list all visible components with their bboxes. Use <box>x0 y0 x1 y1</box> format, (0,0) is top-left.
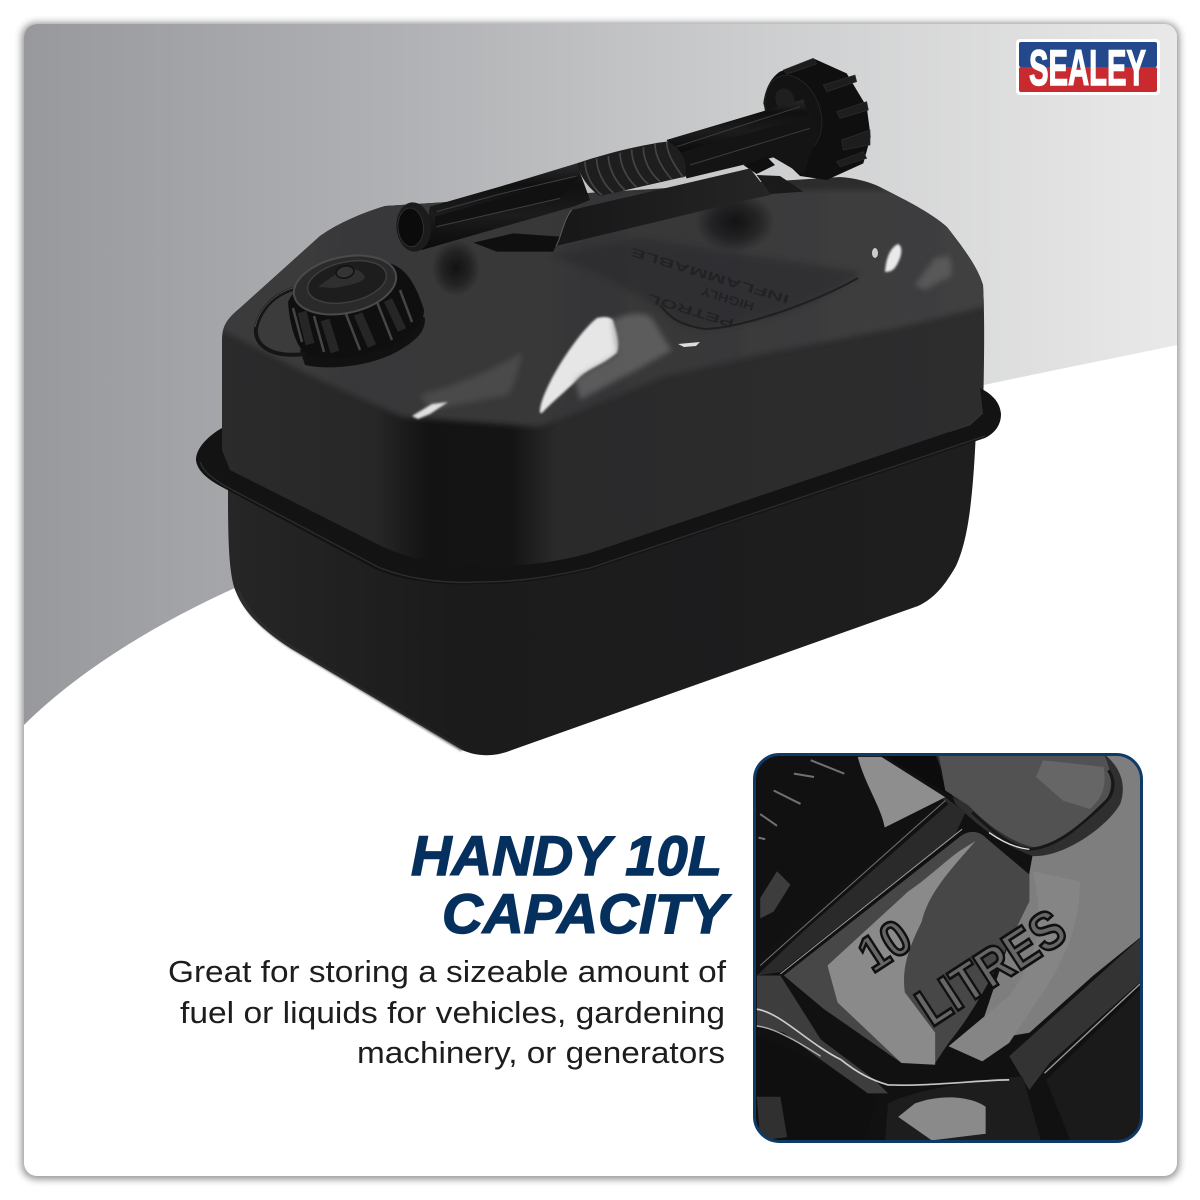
filler cap knurled side <box>288 261 424 358</box>
glossy speck <box>872 248 878 258</box>
left top glare <box>760 871 790 918</box>
plate ridge <box>972 770 1113 849</box>
ridge highlights <box>757 1009 1009 1085</box>
embossed lettering: PETROL <box>646 291 736 331</box>
filler cap strap <box>256 286 318 355</box>
right label patch <box>948 1016 1014 1062</box>
embossed lettering: INFLAMMABLE <box>629 245 791 307</box>
left ridge <box>757 976 888 1093</box>
can top surface <box>210 190 1000 427</box>
nozzle ring <box>395 201 433 253</box>
lower centre dark facet <box>886 1076 1040 1140</box>
lower left reflection <box>757 1097 787 1140</box>
spout clip <box>743 157 775 174</box>
glossy patch right <box>915 256 952 290</box>
handle shadow on top <box>701 200 769 248</box>
cap knurl ribs <box>293 290 412 352</box>
embossed text LITRES: LITRES <box>906 898 1077 1038</box>
cap rear face <box>755 67 832 159</box>
dark grooved bands <box>757 797 965 976</box>
corrugated hose <box>577 142 686 196</box>
dark handle wedge <box>945 790 958 800</box>
can upper body <box>222 177 984 568</box>
handle plate tail <box>757 175 803 194</box>
spout lower tube <box>422 163 590 250</box>
lower body sheen <box>238 590 462 750</box>
handle plate recess <box>935 753 1123 856</box>
cap lugs <box>783 58 870 167</box>
cap knurl rib faces <box>302 300 402 352</box>
plate edge <box>556 210 572 246</box>
tube sheen line <box>437 176 577 227</box>
lower right dark panel <box>1046 990 1140 1140</box>
panel edge highlight <box>678 342 700 347</box>
dark valley lower right <box>1009 932 1147 1090</box>
heading: CAPACITY <box>442 882 732 945</box>
embossed lettering: HIGHLY <box>699 284 756 314</box>
can lower body <box>228 430 976 755</box>
glossy ripple sheen <box>575 314 672 400</box>
embossed label recess <box>550 238 860 330</box>
spout upper tube <box>667 99 820 178</box>
inset border <box>754 754 1142 1142</box>
glossy highlight large <box>540 317 618 413</box>
nozzle opening <box>397 207 425 248</box>
heading: HANDY 10L <box>411 824 722 887</box>
cap top inner ring <box>304 254 390 310</box>
cap top strap lug <box>318 268 365 288</box>
recessed label dark <box>784 832 1029 1063</box>
grey gradient background <box>24 24 1177 725</box>
embossed text 10: 10 <box>848 908 921 983</box>
light bevel upper right <box>949 753 1147 1046</box>
cap body <box>763 58 871 180</box>
glossy highlight small <box>412 402 448 419</box>
glossy reflection band <box>420 352 522 410</box>
plate light patch <box>1036 760 1105 809</box>
carry handle plate <box>556 168 771 246</box>
lower centre glare <box>898 1097 986 1140</box>
filler cap strap sheen <box>255 285 318 327</box>
upper tube sheen <box>677 107 810 165</box>
glossy highlight right <box>885 244 901 272</box>
spout tube groove <box>435 176 580 227</box>
plate shade <box>939 753 1111 848</box>
jerry can product illustration <box>196 58 1001 755</box>
filler collar <box>300 300 425 367</box>
left top letter marks <box>759 760 844 839</box>
embossed lettering <box>629 245 791 331</box>
upper tube top rail <box>667 99 808 153</box>
embossed label edge <box>660 278 858 329</box>
body text: machinery, or generators <box>357 1035 725 1070</box>
light label patch left <box>827 841 976 1065</box>
body text: Great for storing a sizeable amount of <box>168 954 726 989</box>
cap top centre <box>335 264 355 280</box>
body text: fuel or liquids for vehicles, gardening <box>180 995 725 1030</box>
under-plate curl <box>473 233 560 252</box>
rim <box>196 388 1001 584</box>
nozzle shadow on top <box>436 244 476 292</box>
rim highlight <box>200 436 985 582</box>
cap rear inner <box>772 85 798 115</box>
inset close-up photo <box>754 753 1147 1147</box>
lower left dark panel <box>757 1036 878 1147</box>
top left glare <box>858 757 945 827</box>
heading <box>411 824 732 945</box>
filler cap top <box>288 247 402 323</box>
body text <box>168 954 726 1070</box>
